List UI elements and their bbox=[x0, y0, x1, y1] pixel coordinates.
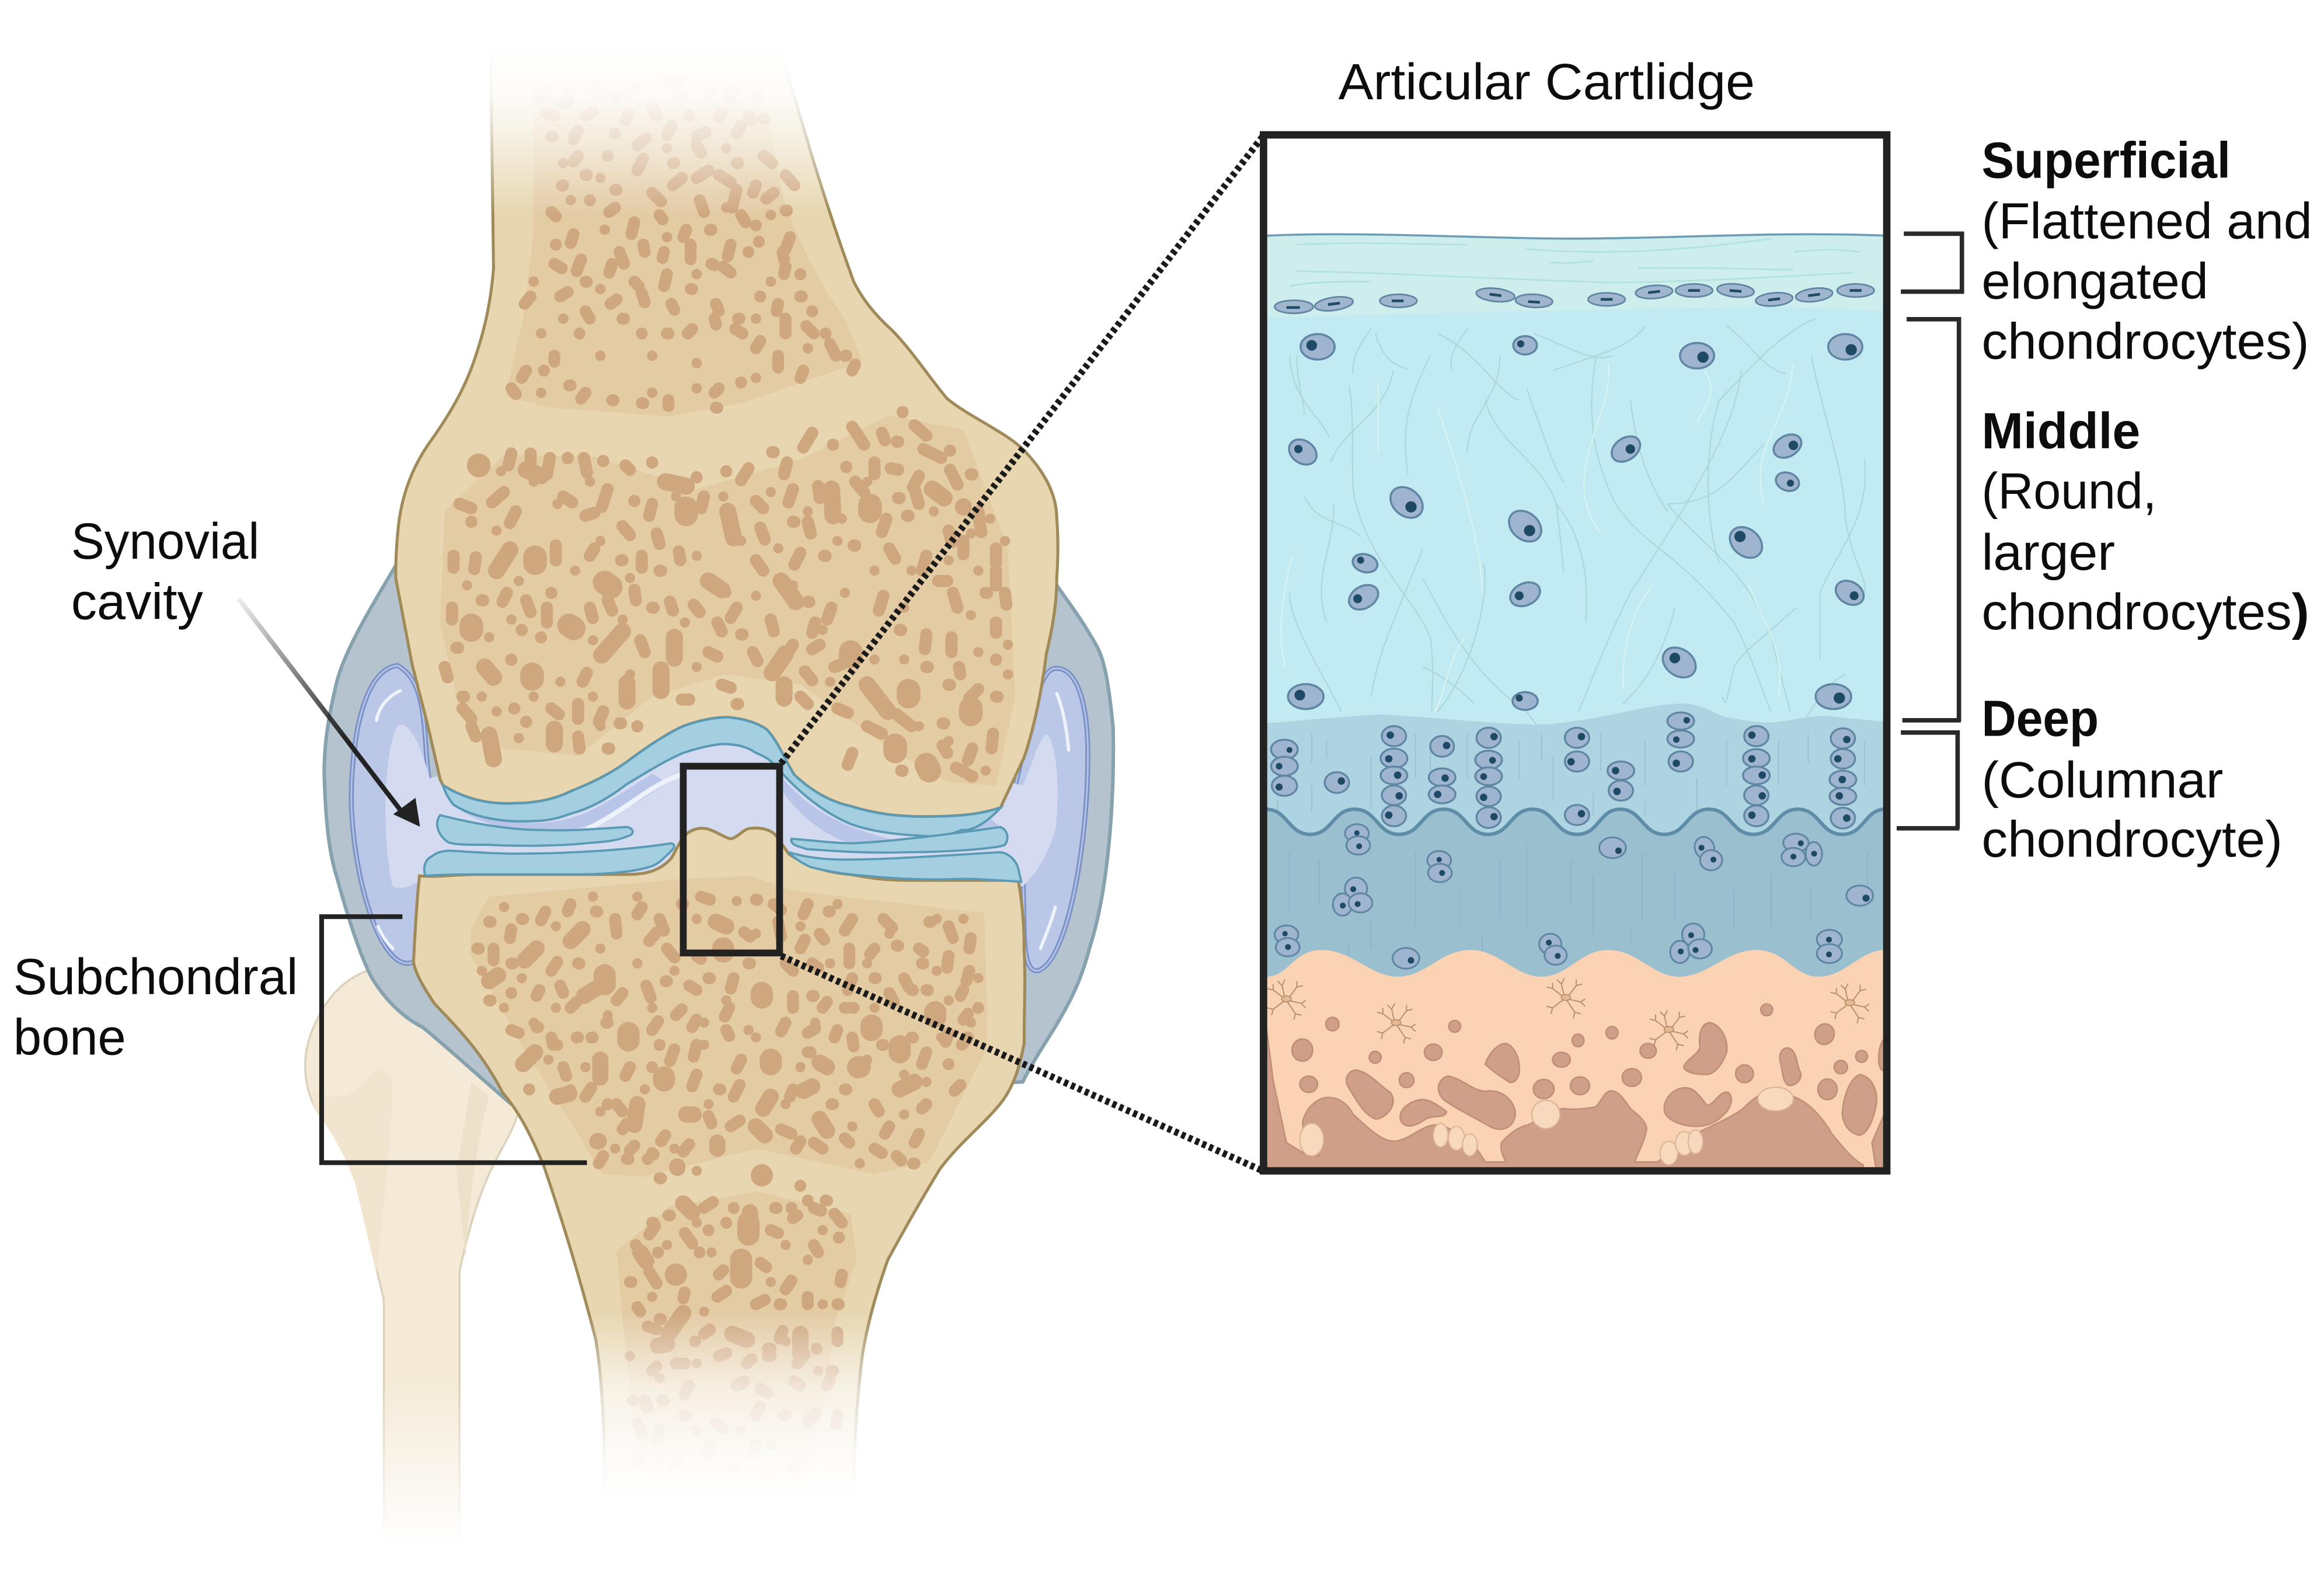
femur bbox=[396, 47, 1058, 817]
marrow bbox=[1266, 1023, 1863, 1171]
label: deep zone bbox=[1982, 690, 2283, 868]
label: subchondral bone: bone bbox=[13, 1008, 126, 1065]
knee joint illustration bbox=[305, 44, 1113, 1556]
cartilage box frame bbox=[1263, 135, 1887, 1171]
label: deep zone: (Columnar bbox=[1982, 751, 2223, 809]
calcified zone bbox=[1266, 809, 1885, 985]
deep zone bbox=[1267, 703, 1885, 837]
title: articular cartilage: Articular Cartlidge bbox=[1339, 53, 1755, 110]
subchondral bone bracket bbox=[322, 917, 587, 1163]
femoral articular cartilage bbox=[443, 717, 1001, 837]
tibia bbox=[413, 828, 1025, 1503]
label: superficial zone: Superficial bbox=[1982, 132, 2231, 189]
tibia head spongy bone bbox=[470, 876, 987, 1177]
superficial zone bbox=[1267, 234, 1885, 320]
osteoclasts bbox=[1300, 1087, 1793, 1165]
bracket: deep zone bbox=[1897, 733, 1959, 828]
flattened superficial chondrocytes bbox=[1274, 283, 1874, 313]
label: middle zone: Middle bbox=[1982, 402, 2140, 459]
marrow cavities bbox=[1292, 1004, 1877, 1135]
columnar deep chondrocytes bbox=[1271, 712, 1856, 828]
synovial cavity bbox=[351, 666, 1088, 971]
label: middle zone: (Round, bbox=[1982, 462, 2156, 520]
calcified zone chondrocytes bbox=[1274, 824, 1873, 969]
label: middle zone: larger bbox=[1982, 524, 2115, 581]
tibia shaft spongy bone bbox=[616, 1192, 856, 1503]
label: superficial zone: elongated bbox=[1982, 253, 2208, 310]
label: superficial zone: (Flattened and bbox=[1982, 193, 2312, 250]
label: subchondral bone bbox=[13, 948, 298, 1065]
label: synovial cavity: Synovial bbox=[71, 513, 259, 570]
dotted zoom line upper bbox=[781, 137, 1263, 763]
osteocytes bbox=[1267, 978, 1869, 1050]
femur trabecular pores bbox=[445, 82, 1008, 776]
panel: articular cartilage zones bbox=[1263, 135, 1887, 1171]
tibia trabecular pores bbox=[478, 897, 978, 1475]
left meniscus upper bbox=[437, 815, 633, 846]
round middle chondrocytes bbox=[1284, 334, 1868, 710]
joint capsule bbox=[324, 563, 1113, 1104]
arrow: synovial cavity pointer bbox=[239, 599, 420, 827]
subchondral bone layer bbox=[1266, 950, 1885, 1171]
dotted zoom line lower bbox=[781, 956, 1263, 1171]
bracket: superficial zone bbox=[1901, 234, 1964, 294]
bracket: middle zone bbox=[1903, 319, 1961, 721]
label: superficial zone bbox=[1982, 132, 2312, 370]
femur shaft spongy bone bbox=[506, 83, 863, 416]
fibula bone bbox=[305, 963, 534, 1556]
label: synovial cavity: cavity bbox=[71, 573, 203, 630]
label: deep zone: chondrocyte) bbox=[1982, 810, 2283, 868]
zoom box on joint bbox=[683, 766, 779, 953]
femur condyle spongy bone bbox=[440, 415, 1015, 786]
label: superficial zone: chondrocytes) bbox=[1982, 312, 2309, 370]
label: deep zone: Deep bbox=[1982, 690, 2099, 747]
right tibial cartilage bbox=[789, 852, 1021, 882]
label: middle zone bbox=[1982, 402, 2309, 640]
right meniscus upper bbox=[791, 827, 1008, 852]
label: synovial cavity bbox=[71, 513, 259, 630]
left tibial cartilage bbox=[424, 844, 674, 876]
label: middle zone: chondrocytes ) bbox=[1982, 583, 2309, 640]
label: subchondral bone: Subchondral bbox=[13, 948, 298, 1005]
middle zone bbox=[1267, 307, 1885, 741]
